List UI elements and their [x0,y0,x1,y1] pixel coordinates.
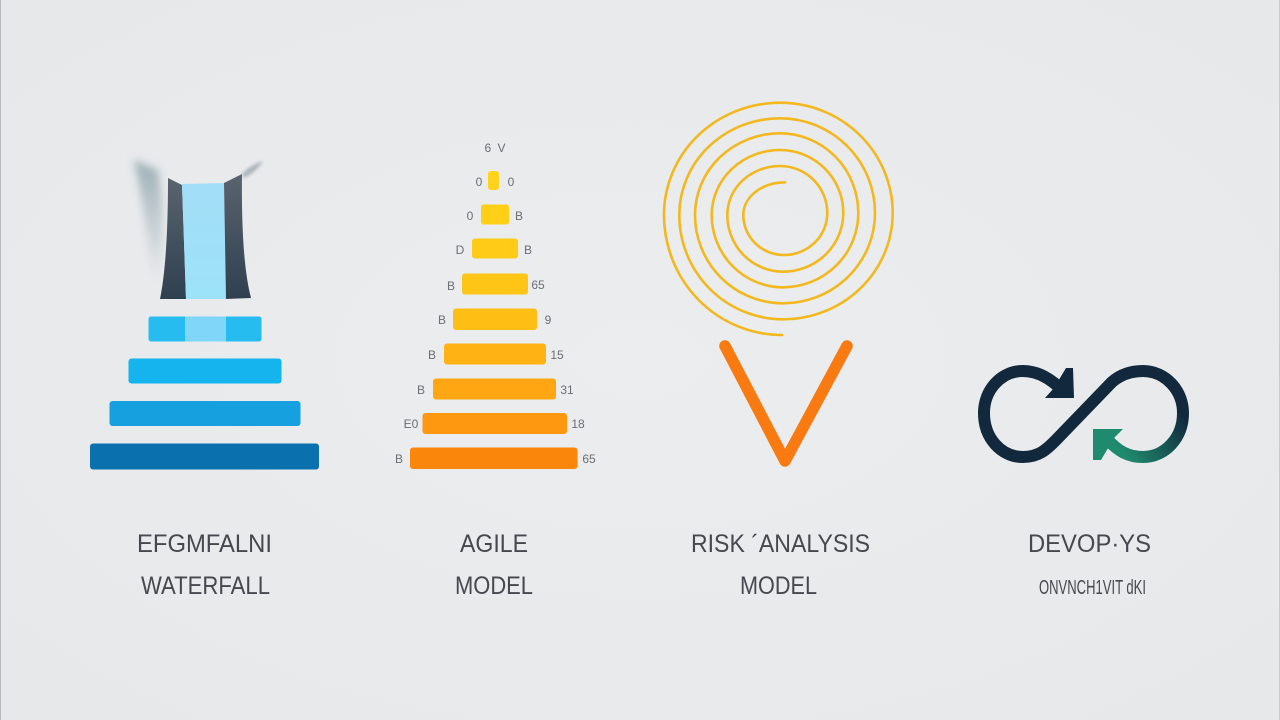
heading: agile line 1: AGILE [460,530,528,558]
label: agile top row: 6 V [484,141,506,155]
icon: spiral [664,103,893,335]
agile row 6 [438,308,552,330]
agile row 2: 0 [476,175,483,189]
agile row 6: B [438,313,446,327]
heading: waterfall line 1: EFGMFALNI [137,530,272,558]
agile row 5: B [447,279,455,293]
agile row 8 [417,378,574,400]
heading: risk analysis line 2: MODEL [740,572,817,600]
agile row 3 [467,204,523,224]
agile row 4 [456,238,532,258]
heading: risk analysis line 1: RISK ´ANALYSIS [691,530,870,558]
agile row 7: B [428,348,436,362]
agile row 8: B [417,383,425,397]
agile row 7 [428,344,564,364]
agile row 2: 0 [508,175,515,189]
agile row 4: D [456,243,465,257]
agile row 5 [447,274,545,294]
icon: infinity loop with arrows [984,368,1183,460]
agile row 9: E0 [404,417,419,431]
agile row 4: B [524,243,532,257]
panel: devops [984,368,1183,599]
heading: waterfall line 2: WATERFALL [141,572,270,600]
agile row 6: 9 [545,313,552,327]
icon: waterfall top column [134,160,263,299]
agile row 10 [395,448,596,469]
agile row 2 [476,171,515,190]
heading: agile line 2: MODEL [455,572,533,600]
icon: orange V [725,346,847,461]
bar: waterfall step 3 [110,401,300,426]
heading: devops line 1: DEVOP·YS [1028,530,1151,558]
heading: devops line 2: ONVNCH1VIT dKI [1039,577,1146,599]
bar: waterfall step 1 [148,316,262,342]
agile row 8: 31 [560,383,574,397]
bar: waterfall step 2 [128,358,282,384]
panel: waterfall model [90,160,319,600]
agile row 3: B [515,209,523,223]
panel: agile model [395,141,596,600]
agile row 7: 15 [550,348,564,362]
agile row 9: 18 [571,417,585,431]
agile row 9 [404,413,585,434]
bar: waterfall step 4 [90,444,319,470]
agile row 10: 65 [582,452,596,466]
agile row 10: B [395,452,403,466]
agile row 5: 65 [531,278,545,292]
agile row 3: 0 [467,209,474,223]
panel: risk analysis model [664,103,893,600]
